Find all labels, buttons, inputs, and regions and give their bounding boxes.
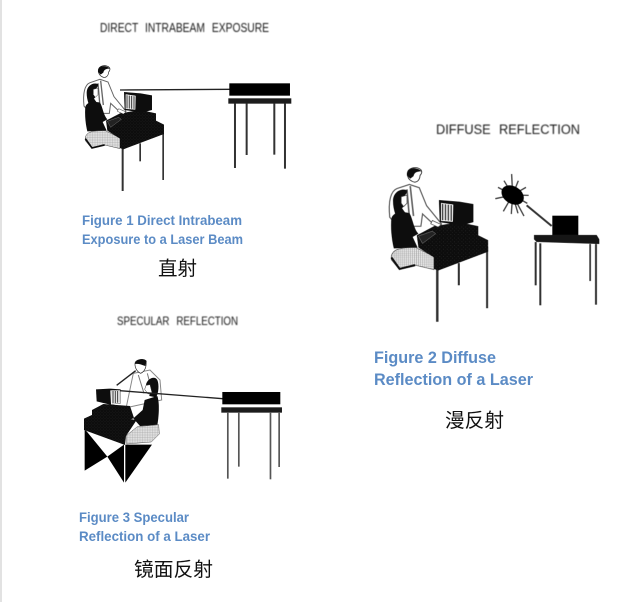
reflected beam: [527, 205, 552, 226]
figure 1 heading: DIRECT INTRABEAM EXPOSURE: [100, 21, 269, 35]
figure 2 illustration: diffuse reflection: [389, 168, 599, 322]
figure 2 caption: [374, 348, 533, 389]
figure 2 heading: DIFFUSE REFLECTION: [436, 122, 580, 137]
figure 3 caption: Reflection of a Laser: [79, 528, 211, 544]
laser on table: [228, 83, 291, 169]
figure 3 heading: SPECULAR REFLECTION: [117, 316, 238, 328]
figure 1 caption: Figure 1 Direct Intrabeam: [82, 213, 242, 228]
reflected beam to eye: [117, 371, 136, 385]
figure 3 caption: [79, 509, 211, 544]
figure 3 illustration: specular reflection: [84, 359, 282, 483]
figure 1 caption: Exposure to a Laser Beam: [82, 232, 243, 247]
figure 1 chinese label: 直射: [158, 258, 197, 280]
figure 2 caption: Figure 2 Diffuse: [374, 348, 496, 367]
operator at computer: [84, 66, 164, 191]
laser beam: [120, 391, 223, 399]
figure 2 chinese label: 漫反射: [445, 410, 504, 432]
laser beam: [120, 87, 230, 92]
figure 2 caption: Reflection of a Laser: [374, 370, 533, 389]
figure 3 caption: Figure 3 Specular: [79, 509, 190, 525]
operator at computer: [389, 168, 488, 322]
laser on table: [534, 216, 599, 305]
laser on table: [221, 392, 282, 479]
mirrored desk with operators: [84, 359, 162, 483]
diffuse reflection burst: [495, 174, 529, 216]
figure 1 caption: [82, 213, 243, 247]
left page edge: [0, 0, 2, 602]
figure 3 chinese label: 镜面反射: [134, 559, 213, 581]
figure 1 illustration: direct intrabeam exposure: [84, 66, 291, 191]
